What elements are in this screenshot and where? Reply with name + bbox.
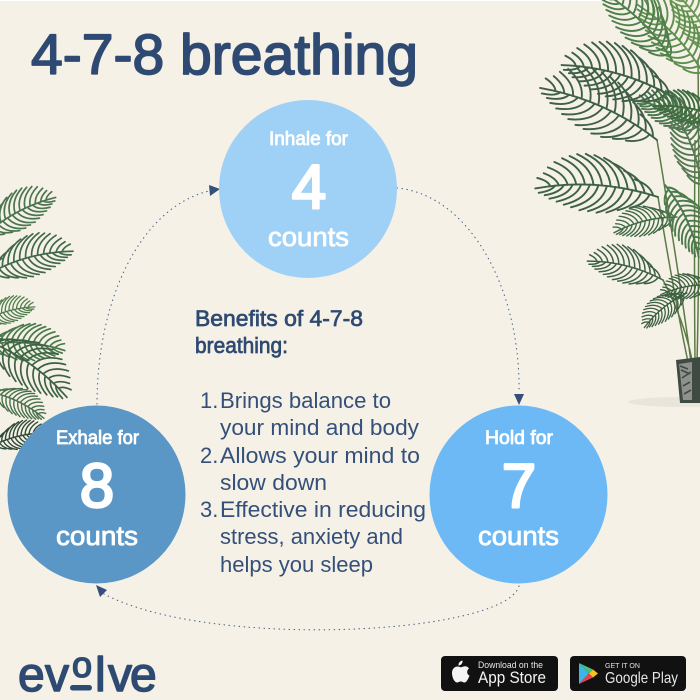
circle: hold — [430, 406, 608, 584]
logo underline — [70, 685, 92, 690]
benefit 3: 3. — [200, 497, 218, 522]
benefit 1 — [200, 388, 419, 440]
benefits heading — [195, 306, 363, 358]
plant: left palm — [0, 176, 85, 455]
benefit 3 — [200, 497, 426, 577]
benefit 2: Allows your mind to — [220, 443, 420, 468]
icon: apple — [452, 660, 470, 682]
plant: right palm — [532, 0, 700, 407]
benefit 2 — [200, 443, 420, 495]
pot mottling — [680, 366, 691, 394]
exhale count: 8 — [80, 452, 114, 521]
plant pot — [676, 357, 700, 403]
app store small label: Download on the — [478, 660, 543, 671]
top edge strip — [0, 0, 610, 1]
benefits text block — [195, 306, 426, 577]
arrow: exhale to inhale — [97, 185, 220, 404]
benefit 3: Effective in reducing — [220, 497, 426, 522]
palm stems — [657, 60, 699, 362]
hold unit: counts — [478, 521, 559, 551]
arrow: hold to exhale — [96, 585, 519, 630]
benefit 2: 2. — [200, 443, 218, 468]
icon: play triangle — [579, 663, 598, 684]
inhale label: Inhale for — [269, 129, 349, 150]
app store name: App Store — [478, 668, 546, 687]
arrow: inhale to hold — [397, 188, 524, 405]
left fronds — [0, 176, 85, 455]
benefit 3: stress, anxiety and — [220, 524, 403, 549]
palm fronds — [532, 0, 700, 335]
badge: Google Play — [570, 656, 686, 691]
badge: App Store — [441, 656, 558, 691]
benefit 1: Brings balance to — [220, 388, 391, 413]
hold count: 7 — [502, 452, 536, 521]
hold label: Hold for — [485, 428, 554, 449]
exhale label: Exhale for — [56, 428, 140, 449]
floor shadow — [628, 397, 700, 407]
inhale unit: counts — [268, 222, 349, 252]
benefit 3: helps you sleep — [220, 552, 373, 577]
exhale unit: counts — [56, 521, 138, 551]
logo wordmark: o — [72, 644, 92, 685]
inhale count: 4 — [292, 153, 326, 222]
benefit 1: your mind and body — [220, 415, 419, 440]
benefits heading: breathing: — [195, 333, 288, 358]
benefit 2: slow down — [220, 470, 327, 495]
logo: evolve — [18, 644, 157, 700]
circle: exhale — [8, 406, 186, 584]
benefit 1: 1. — [200, 388, 218, 413]
title: 4-7-8 breathing — [31, 23, 418, 87]
google play name: Google Play — [605, 670, 678, 687]
google small label: GET IT ON — [605, 661, 640, 670]
benefits heading: Benefits of 4-7-8 — [195, 306, 363, 331]
pot pattern — [679, 362, 692, 400]
circle: inhale — [219, 100, 397, 278]
